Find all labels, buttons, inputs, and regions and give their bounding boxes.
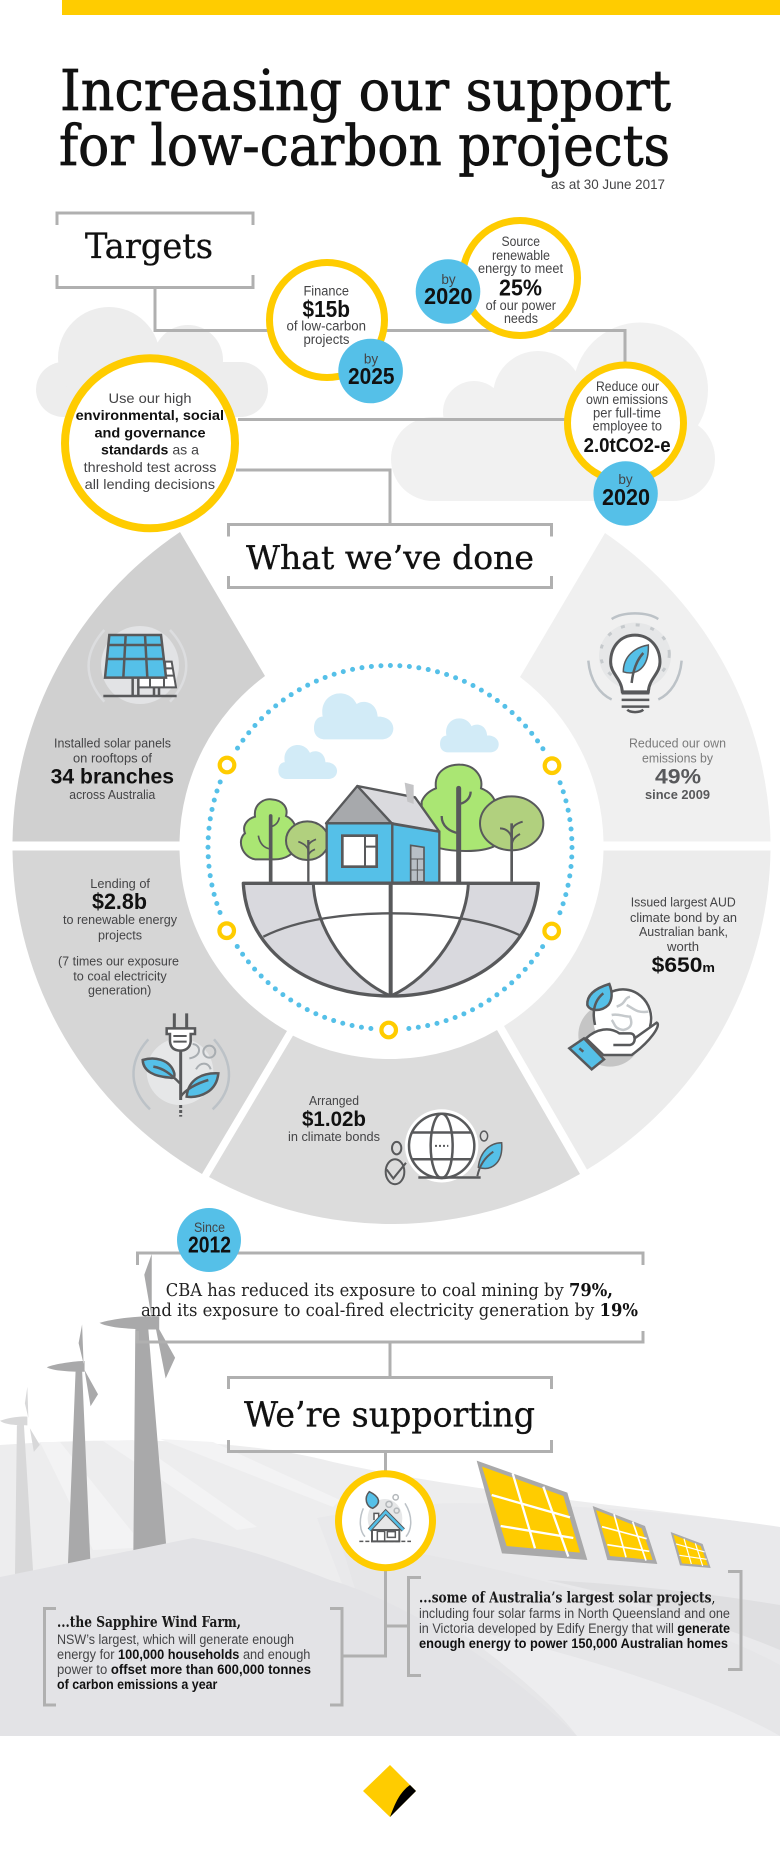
dotted ring bbox=[208, 666, 572, 1030]
badge: since 2012: 2012 bbox=[188, 1232, 231, 1258]
target: reduce emissions: per full-time bbox=[593, 405, 661, 420]
target: ESG standards: standards as a bbox=[101, 442, 199, 458]
text: solar panels: on rooftops of bbox=[73, 750, 152, 765]
text: lending: to renewable energy bbox=[63, 912, 177, 927]
badge: by 2020: by bbox=[618, 472, 633, 487]
badge: by 2020: by bbox=[441, 272, 456, 287]
text: solar panels: 34 branches bbox=[51, 765, 174, 788]
sector: emissions (top right) bbox=[520, 533, 770, 842]
heading box: What we've done: What we’ve done bbox=[246, 538, 534, 577]
text block: Sapphire Wind Farm: NSW’s largest, which will generate enough bbox=[57, 1632, 294, 1647]
text: climate bond: Australian bank, bbox=[639, 924, 728, 939]
text block: Sapphire Wind Farm: power to offset more than 600,000 tonnes bbox=[57, 1662, 311, 1677]
heading box: What we've done bbox=[228, 524, 552, 588]
yellow ring markers bbox=[212, 750, 567, 1045]
target: finance: projects bbox=[304, 332, 350, 347]
text block: Sapphire Wind Farm: of carbon emissions a year bbox=[57, 1677, 218, 1692]
text: lending: to coal electricity bbox=[73, 969, 167, 984]
heading box: We're supporting bbox=[228, 1378, 552, 1452]
target: ESG standards: Use our high bbox=[108, 390, 192, 406]
target: finance: of low-carbon bbox=[286, 319, 366, 334]
connector lines: targets bbox=[155, 288, 625, 524]
target: reduce emissions: Reduce our bbox=[596, 379, 659, 394]
text: solar panels bbox=[51, 736, 174, 802]
target: ESG standards: all lending decisions bbox=[85, 476, 215, 492]
date note: as at 30 June 2017 bbox=[551, 176, 665, 192]
text: climate bonds: $1.02b bbox=[302, 1108, 366, 1131]
text: exposure reduction: CBA has reduced its exposure to coal mining by 79%, bbox=[166, 1280, 613, 1301]
badge: by 2025: by bbox=[364, 351, 378, 366]
badge: by 2020 bbox=[416, 259, 480, 324]
text: emissions: emissions by bbox=[642, 750, 713, 765]
text block: solar projects: including four solar farms in North Queensland and one bbox=[419, 1606, 730, 1621]
target: source renewable energy: needs bbox=[504, 311, 538, 326]
house on globe scene bbox=[241, 693, 543, 996]
target: reduce emissions: 2.0tCO2-e bbox=[584, 435, 671, 457]
text: lending: generation) bbox=[88, 983, 151, 998]
target: ESG standards: threshold test across bbox=[84, 459, 216, 475]
badge: by 2025: 2025 bbox=[348, 363, 395, 389]
badge: since 2012: Since bbox=[194, 1220, 225, 1235]
target: source renewable energy: of our power bbox=[486, 298, 556, 313]
central illustration bbox=[208, 666, 572, 1045]
turbine: large bbox=[100, 1254, 175, 1558]
title: Increasing our support bbox=[60, 59, 671, 124]
text: climate bond: climate bond by an bbox=[630, 910, 737, 925]
target: ESG standards bbox=[65, 358, 235, 528]
foreground hill bbox=[0, 1538, 577, 1736]
target: finance: $15b bbox=[302, 296, 350, 322]
text: climate bonds bbox=[288, 1093, 380, 1144]
target: ESG standards: environmental, social bbox=[76, 407, 224, 423]
connector: supporting tree bbox=[343, 1452, 408, 1656]
text block: solar projects: ...some of Australia’s largest solar projects, bbox=[419, 1588, 715, 1606]
left background cloud bbox=[36, 307, 268, 417]
turbine: medium bbox=[47, 1324, 98, 1571]
text: climate bond: Issued largest AUD bbox=[631, 895, 736, 910]
wind turbines bbox=[0, 1254, 175, 1580]
icon: light bulb with leaf bbox=[588, 613, 682, 712]
heading box: We're supporting: We’re supporting bbox=[244, 1396, 535, 1436]
text: lending bbox=[58, 876, 179, 998]
text: lending: projects bbox=[98, 928, 142, 943]
target: source renewable energy: renewable bbox=[492, 248, 550, 263]
panel: medium bbox=[593, 1506, 657, 1564]
badge: since 2012 bbox=[177, 1208, 241, 1272]
target: reduce emissions: employee to bbox=[592, 418, 662, 434]
landscape background bbox=[0, 1439, 780, 1736]
solar panels bbox=[477, 1461, 711, 1568]
right background cloud bbox=[391, 322, 715, 501]
text: lending: Lending of bbox=[90, 876, 150, 891]
text: solar panels: Installed solar panels bbox=[54, 736, 171, 751]
text block: solar projects: in Victoria developed by Edify Energy that will generate bbox=[419, 1621, 730, 1636]
text: lending: $2.8b bbox=[92, 889, 147, 914]
sector: solar panels (top left) bbox=[12, 532, 265, 842]
text block: Sapphire Wind Farm: energy for 100,000 households and enough bbox=[57, 1647, 310, 1662]
text: solar panels: across Australia bbox=[69, 787, 156, 802]
target: reduce emissions: own emissions bbox=[586, 392, 668, 407]
title: for low-carbon projects bbox=[59, 114, 670, 179]
heading box: Targets: Targets bbox=[85, 227, 213, 267]
text: climate bond bbox=[630, 895, 737, 977]
text: emissions bbox=[629, 736, 726, 802]
text: climate bonds: in climate bonds bbox=[288, 1129, 380, 1144]
logo bbox=[363, 1765, 416, 1817]
text: climate bond: $650 m bbox=[652, 954, 715, 977]
target: source renewable energy: energy to meet bbox=[478, 261, 563, 276]
target: source renewable energy: Source bbox=[502, 234, 540, 249]
home icon circle bbox=[338, 1474, 432, 1568]
icon: house with leaf bbox=[359, 1492, 411, 1541]
panel: small bbox=[671, 1532, 711, 1568]
sector: climate bond (bottom right) bbox=[504, 850, 770, 1170]
text block: solar projects bbox=[408, 1572, 741, 1676]
text: climate bond: worth bbox=[666, 939, 699, 954]
target: finance bbox=[270, 262, 403, 403]
text: emissions: since 2009 bbox=[645, 787, 710, 802]
target: source renewable energy bbox=[416, 220, 578, 336]
icon: solar panel bbox=[89, 626, 186, 704]
panel: large bbox=[477, 1461, 587, 1560]
title bbox=[59, 59, 671, 179]
sector: climate bonds (bottom) bbox=[209, 1030, 580, 1224]
text block: Sapphire Wind Farm: ...the Sapphire Wind Farm, bbox=[57, 1613, 241, 1631]
connector: callout to supporting bbox=[388, 1342, 392, 1376]
heading box: Targets bbox=[57, 213, 253, 288]
text block: Sapphire Wind Farm bbox=[44, 1608, 342, 1705]
badge: by 2020: 2020 bbox=[424, 283, 472, 309]
icon: globe with leaf bbox=[386, 1109, 502, 1184]
text: exposure reduction bbox=[141, 1280, 638, 1321]
target: finance: Finance bbox=[304, 284, 349, 298]
badge: by 2020: 2020 bbox=[602, 484, 650, 510]
turbine: small bbox=[0, 1387, 40, 1580]
text block: solar projects: enough energy to power 150,000 Australian homes bbox=[419, 1636, 728, 1651]
target: source renewable energy: 25% bbox=[499, 274, 542, 300]
sector: lending (bottom left) bbox=[12, 850, 287, 1174]
target: reduce emissions bbox=[568, 365, 684, 526]
icon: hand holding globe bbox=[569, 984, 658, 1069]
text: climate bonds: Arranged bbox=[309, 1093, 359, 1108]
badge: by 2020 bbox=[593, 461, 658, 526]
text: emissions: Reduced our own bbox=[629, 736, 726, 751]
icon: plug with leaves bbox=[133, 1013, 229, 1117]
text: exposure reduction: and its exposure to coal-fired electricity generation by 19% bbox=[141, 1300, 638, 1321]
top yellow bar bbox=[62, 0, 780, 15]
text: lending: (7 times our exposure bbox=[58, 954, 179, 968]
text: emissions: 49% bbox=[655, 765, 701, 788]
badge: by 2025 bbox=[338, 339, 403, 403]
target: ESG standards: and governance bbox=[94, 424, 206, 440]
since 2012 callout bbox=[138, 1208, 643, 1342]
